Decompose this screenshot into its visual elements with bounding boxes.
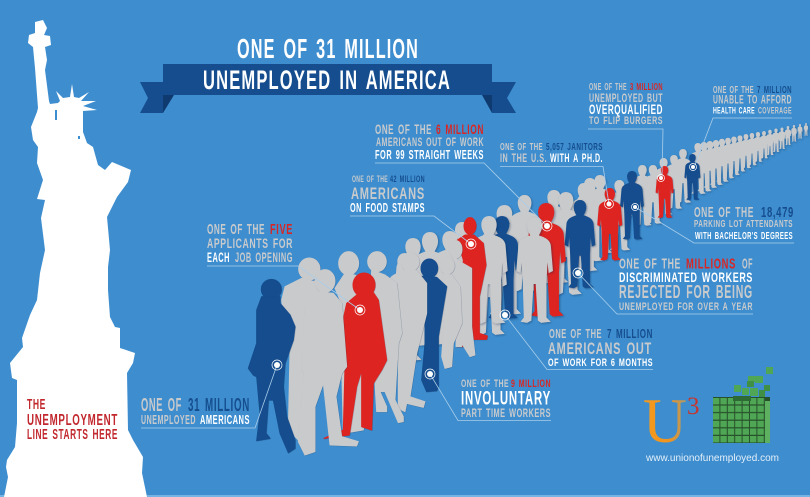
gray figure 7 <box>450 241 475 357</box>
logo: U3 wordmark: U <box>643 385 687 456</box>
callout: 42 million food stamps: ON FOOD STAMPS <box>350 201 425 215</box>
callout: one of the five applicants: APPLICANTS FOR <box>207 235 293 251</box>
statue caption <box>27 396 118 443</box>
callout: 3 million overqualified: UNEMPLOYED BUT <box>589 91 663 105</box>
callout: one of 31 million: UNEMPLOYED <box>141 413 196 427</box>
callout: 18,479 parking lot attendants <box>632 204 794 243</box>
tail of the queue <box>538 122 810 283</box>
blue figure 5 <box>684 154 700 200</box>
callout: 9 million involuntary part time: ONE OF THE <box>461 378 509 390</box>
callout: 7 million health care: HEALTH CARE <box>713 106 755 116</box>
callout: 7 million health care <box>690 85 792 170</box>
website URL: www.unionofunemployed.com <box>645 452 779 464</box>
gray pair <box>471 217 553 335</box>
callout: 7 million out of work 6 months: 7 MILLION <box>607 326 653 341</box>
icon: Statue of Liberty silhouette <box>4 20 147 497</box>
callout: 6 million out of work: FOR 99 STRAIGHT WEEKS <box>375 148 484 162</box>
red figure 2 <box>457 218 487 347</box>
callout: 3 million overqualified: 3 MILLION <box>630 82 663 93</box>
callout: millions of discriminated workers <box>573 256 753 314</box>
title banner ribbon <box>140 64 516 113</box>
callout: 42 million food stamps: AMERICANS <box>351 184 425 203</box>
logo: U3 wordmark: 3 <box>687 393 700 420</box>
callout: millions of discriminated workers: MILLIONS <box>686 256 736 272</box>
callout: 9 million involuntary part time <box>425 369 551 420</box>
front group drawn at three times scale <box>248 218 487 455</box>
logo: green cube <box>713 367 773 443</box>
callout: 7 million health care: ONE OF THE <box>713 85 754 96</box>
red figure 3 <box>526 203 566 317</box>
gray back figure <box>282 258 323 440</box>
callout: one of the five applicants <box>207 221 365 315</box>
red figure 1 <box>324 273 387 438</box>
callout: one of the five applicants: FIVE <box>270 221 293 238</box>
callout: one of 31 million: 31 MILLION <box>188 395 250 415</box>
callout: 9 million involuntary part time: 9 MILLION <box>511 378 551 390</box>
callout: 5,057 janitors: WITH A PH.D. <box>550 151 603 165</box>
callout: 3 million overqualified <box>588 82 664 182</box>
callout: 5,057 janitors <box>500 142 614 208</box>
callout: 42 million food stamps: ONE OF THE <box>352 174 388 184</box>
callout: 7 million out of work 6 months: ONE OF THE <box>549 326 602 341</box>
callout: one of the five applicants: EACH <box>207 249 230 265</box>
blue figure 3 <box>565 200 595 288</box>
rear gray figures of front group <box>386 216 508 361</box>
line of silhouetted people <box>248 122 810 455</box>
callout: millions of discriminated workers: ONE OF THE <box>619 256 681 272</box>
red figure 5 <box>656 166 674 218</box>
callout: 5,057 janitors: ONE OF THE <box>500 142 543 153</box>
blue figure behind <box>484 216 520 319</box>
title <box>203 33 451 95</box>
callout: 5,057 janitors: 5,057 JANITORS <box>546 142 603 153</box>
text: OF <box>742 256 753 272</box>
callout: 9 million involuntary part time: PART TIME WORKERS <box>461 406 551 420</box>
callout: 3 million overqualified: OVERQUALIFIED <box>589 101 663 117</box>
blue figure 4 <box>620 171 644 240</box>
statue caption: LINE STARTS HERE <box>27 426 118 443</box>
blue figure 1 <box>248 279 295 453</box>
callout: one of 31 million: ONE OF <box>141 395 182 415</box>
callout: 6 million out of work: 6 MILLION <box>436 121 484 137</box>
callout: 7 million out of work 6 months: OF WORK FOR 6 MONTHS <box>548 357 653 369</box>
blue figure 2 <box>418 259 447 392</box>
statue caption: THE <box>27 396 46 413</box>
callout: 9 million involuntary part time: INVOLUNTARY <box>461 388 551 410</box>
statue caption: UNEMPLOYMENT <box>27 412 118 429</box>
title: UNEMPLOYED IN AMERICA <box>203 65 451 95</box>
callout: 6 million out of work <box>375 121 552 231</box>
callout: 42 million food stamps: 42 MILLION <box>390 174 425 184</box>
callout: 18,479 parking lot attendants: ONE OF THE <box>694 204 754 221</box>
gray figure 5 <box>393 253 427 412</box>
callout: 6 million out of work: ONE OF THE <box>375 121 432 137</box>
callout: one of the five applicants: ONE OF THE <box>207 221 265 238</box>
callout: 5,057 janitors: IN THE U.S. <box>500 151 547 165</box>
callout: 6 million out of work: AMERICANS OUT OF WORK <box>376 135 484 149</box>
gray front figure <box>298 270 358 455</box>
callout: one of 31 million <box>141 360 282 428</box>
callout: 3 million overqualified: ONE OF THE <box>589 82 627 93</box>
callout: 7 million out of work 6 months <box>500 310 653 370</box>
middle gray figures <box>485 192 584 315</box>
callout: one of 31 million: AMERICANS <box>200 413 250 427</box>
callout: 3 million overqualified: TO FLIP BURGERS <box>589 115 663 127</box>
callout: one of the five applicants: JOB OPENING <box>235 249 293 265</box>
gray figure 4 <box>368 252 403 423</box>
red figure 4 <box>597 188 622 261</box>
gray figure 6 <box>440 257 462 368</box>
callout: 7 million out of work 6 months: AMERICANS OUT <box>548 339 652 358</box>
title: ONE OF 31 MILLION <box>237 33 419 64</box>
gray figure 3 <box>335 252 373 433</box>
callout: 42 million food stamps <box>350 174 476 249</box>
